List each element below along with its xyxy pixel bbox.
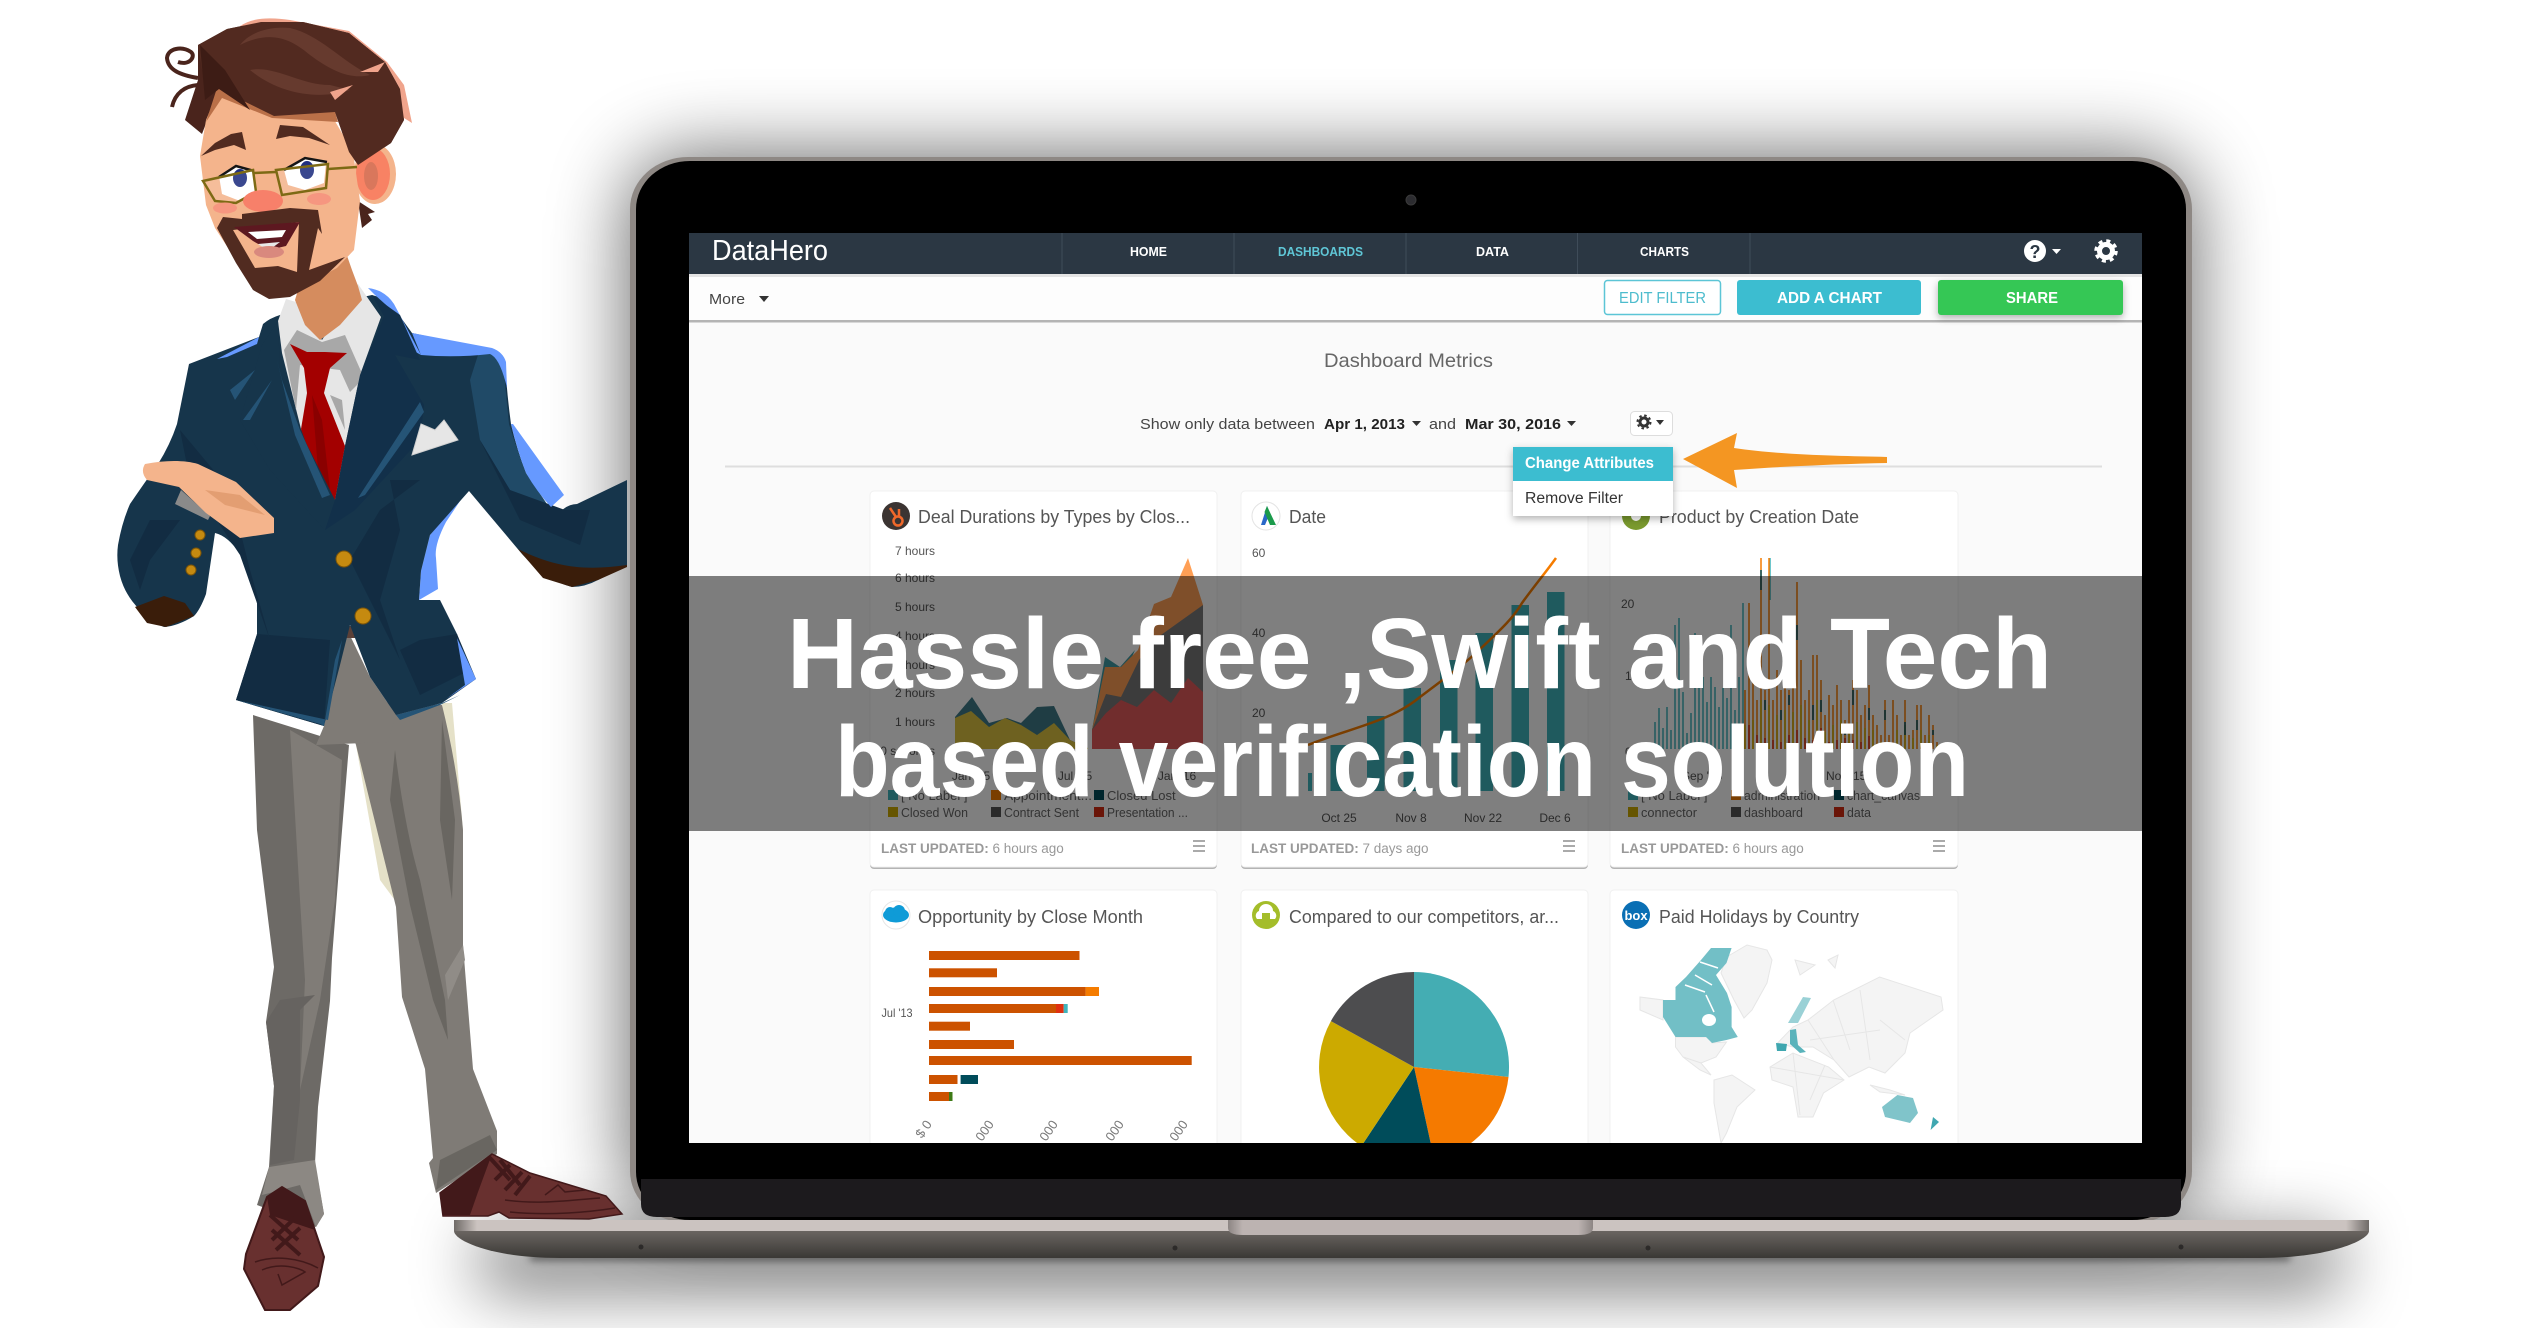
x axis labels [912,1117,1191,1144]
face [200,89,360,290]
card footer [1621,841,1945,856]
y axis labels: 20 [1621,597,1635,611]
menu item: change attributes: Change Attributes [1525,455,1654,472]
gray title band [689,576,2142,831]
laptop chin [641,1179,2181,1217]
y axis labels: 1 hours [895,715,935,729]
legend: dashboard [1744,805,1803,820]
card title: Paid Holidays by Country [1659,907,1859,927]
belt [346,626,360,638]
logo: DataHero [712,235,828,267]
card: product by creation date [1610,491,1958,869]
button: edit filter [1604,280,1720,314]
x axis labels [952,772,1196,780]
navigation bar [689,233,2142,274]
y axis labels: 5 hours [895,600,935,614]
legend: [ No Label ] [1641,788,1708,803]
nav: dashboards: DASHBOARDS [1278,244,1363,259]
sideburn tuft [358,201,375,228]
legend: [ No Label ] [901,788,968,803]
date filter row [1140,412,1672,436]
toolbar [689,274,2142,322]
x axis labels: Jul '15 [1058,769,1092,783]
x axis labels: Sep '15 [1682,769,1723,783]
nav: charts: CHARTS [1640,244,1689,259]
legend: Presentation ... [1107,805,1188,820]
more menu: More [709,291,745,308]
hair pink highlight [240,18,412,123]
bar chart [1308,592,1564,791]
y axis labels: 40 [1252,626,1266,640]
x axis labels: $ 0 [912,1117,935,1141]
y axis labels: 60 [1252,546,1266,560]
legend: Appointment... [1004,788,1092,803]
icon: salesforce [882,901,910,929]
hair top [198,22,404,165]
date filter row: Show only data between [1140,416,1315,433]
card footer: LAST UPDATED: 6 hours ago [881,841,1064,856]
laptop drop shadows [480,157,2340,1290]
x axis labels [1321,811,1571,825]
dashboard screen [689,233,2142,1162]
card title: Deal Durations by Types by Clos... [918,507,1190,527]
icon: help: ? [2030,242,2040,262]
shirt cuff [175,490,210,520]
legend: data [1847,805,1872,820]
y axis labels: 6 hours [895,571,935,585]
date filter row: Apr 1, 2013 [1324,416,1405,433]
card title: Product by Creation Date [1659,507,1859,527]
y axis labels: 10 [1625,669,1639,683]
menu item: remove filter: Remove Filter [1525,490,1623,507]
icon: settings gear [2096,241,2116,261]
card footer: LAST UPDATED: 7 days ago [1251,841,1429,856]
card footer [881,841,1205,856]
webcam [1406,195,1416,205]
x axis labels: 000 [972,1117,997,1144]
jacket right arm light [470,352,549,507]
ear [354,144,396,204]
menu item: change attributes [1513,447,1673,481]
forehead shadow [206,88,338,122]
card title: Compared to our competitors, ar... [1289,907,1559,927]
x axis labels: Jan '16 [1158,769,1196,783]
hand [143,461,274,538]
right shoe [440,1154,622,1219]
tie [290,344,347,500]
y axis labels: 7 hours [895,544,935,558]
dropdown menu [1513,447,1673,516]
y label: Jul '13 [882,1006,913,1020]
beard and moustache [217,208,345,299]
y axis labels: 3 hours [895,658,935,672]
x axis labels: Nov 8 [1395,811,1427,825]
dashboard title: Dashboard Metrics [1324,350,1493,372]
chin skin [233,222,299,272]
card title: Opportunity by Close Month [918,907,1143,927]
card footer: LAST UPDATED: 6 hours ago [1621,841,1804,856]
y axis labels [1621,597,1639,759]
button: share: SHARE [2006,290,2058,307]
legend [888,790,1187,817]
stacked area chart [955,558,1203,749]
y axis labels: 4 hours [895,629,935,643]
legend: administration [1744,788,1820,803]
nav: data: DATA [1476,244,1510,259]
y axis labels [880,544,935,758]
x axis labels: Jan '15 [952,769,990,783]
hair back [185,22,404,165]
orange arrow [1683,433,1887,488]
laptop bezel [636,161,2186,1220]
icon: box: box [1624,908,1648,923]
button: add a chart [1737,280,1921,315]
jacket body [117,295,627,726]
cheeks [213,193,331,214]
x axis labels: Dec 6 [1539,811,1571,825]
legend: chart_canvas [1847,788,1920,803]
legend [1628,788,1920,820]
headline: Hassle free ,Swift and Tech [787,598,2052,710]
trouser front [316,625,396,745]
legend: Closed Won [901,805,968,820]
headline: based verification solution [835,706,1969,818]
more menu [710,294,769,304]
nav: home: HOME [1130,244,1167,259]
right trouser leg [340,700,497,1193]
laptop [454,157,2369,1258]
y axis labels: 20 [1252,706,1266,720]
jacket buttons [186,530,371,624]
mouth [234,222,300,258]
eyebrows [201,125,330,156]
nose [243,190,283,212]
icon: product [1622,502,1650,530]
laptop lid [630,157,2192,1223]
x axis labels: 000 [1166,1117,1191,1144]
elbow patches [135,549,627,627]
eyes [219,158,327,201]
horizontal bar chart [929,951,1192,1101]
jacket lapels [230,295,424,530]
world map [1640,945,1943,1143]
y axis labels: 0 [1625,745,1632,759]
jacket blue side strip [419,489,468,600]
button: share [1938,280,2123,315]
button: edit filter: EDIT FILTER [1619,290,1706,307]
card: opportunity by close month [870,890,1217,1160]
card footer [1251,841,1575,856]
icon: help [2024,240,2061,262]
card: paid holidays by country [1610,890,1958,1160]
hair curl [167,49,198,107]
dense stacked bar chart [1655,558,1941,749]
x axis labels: Oct 25 [1321,811,1357,825]
icon: hubspot [882,502,910,530]
legend: Closed Lost [1107,788,1176,803]
y axis labels [1252,548,1265,717]
button: add a chart: ADD A CHART [1777,290,1882,307]
card title: Date [1289,507,1326,527]
date filter row: Mar 30, 2016 [1465,416,1561,433]
beige leg highlight [328,703,463,954]
left shoe [244,1187,324,1310]
y axis labels: 2 hours [895,686,935,700]
neck [295,250,362,340]
glasses [203,164,357,203]
x axis labels: Nov '15 [1826,769,1867,783]
card: compared to competitors [1241,890,1588,1162]
pocket square [412,420,458,455]
icon: upload cloud [1252,901,1280,929]
filter gear button [1630,412,1672,436]
left trouser leg [253,715,349,1227]
x axis labels: 000 [1102,1117,1127,1144]
trend line [1308,558,1556,745]
y axis labels: 0 [1259,785,1266,799]
jacket shading [130,430,590,726]
card: deal durations [870,491,1217,869]
x axis labels [1682,769,1867,783]
x axis labels: 000 [1036,1117,1061,1144]
date filter row: and [1429,416,1456,433]
character: businessman [117,18,627,1310]
legend: connector [1641,805,1698,820]
card: date [1241,491,1588,869]
headline [787,598,2052,818]
laptop base [454,1220,2369,1258]
y axis labels: 0 seconds [880,744,935,758]
shirt [278,284,381,500]
pie chart [1319,972,1509,1162]
icon: box [1622,901,1650,929]
x axis labels: Nov 22 [1464,811,1502,825]
icon: adwords [1252,502,1280,530]
jacket blue highlights [217,288,564,699]
legend: Contract Sent [1004,805,1079,820]
